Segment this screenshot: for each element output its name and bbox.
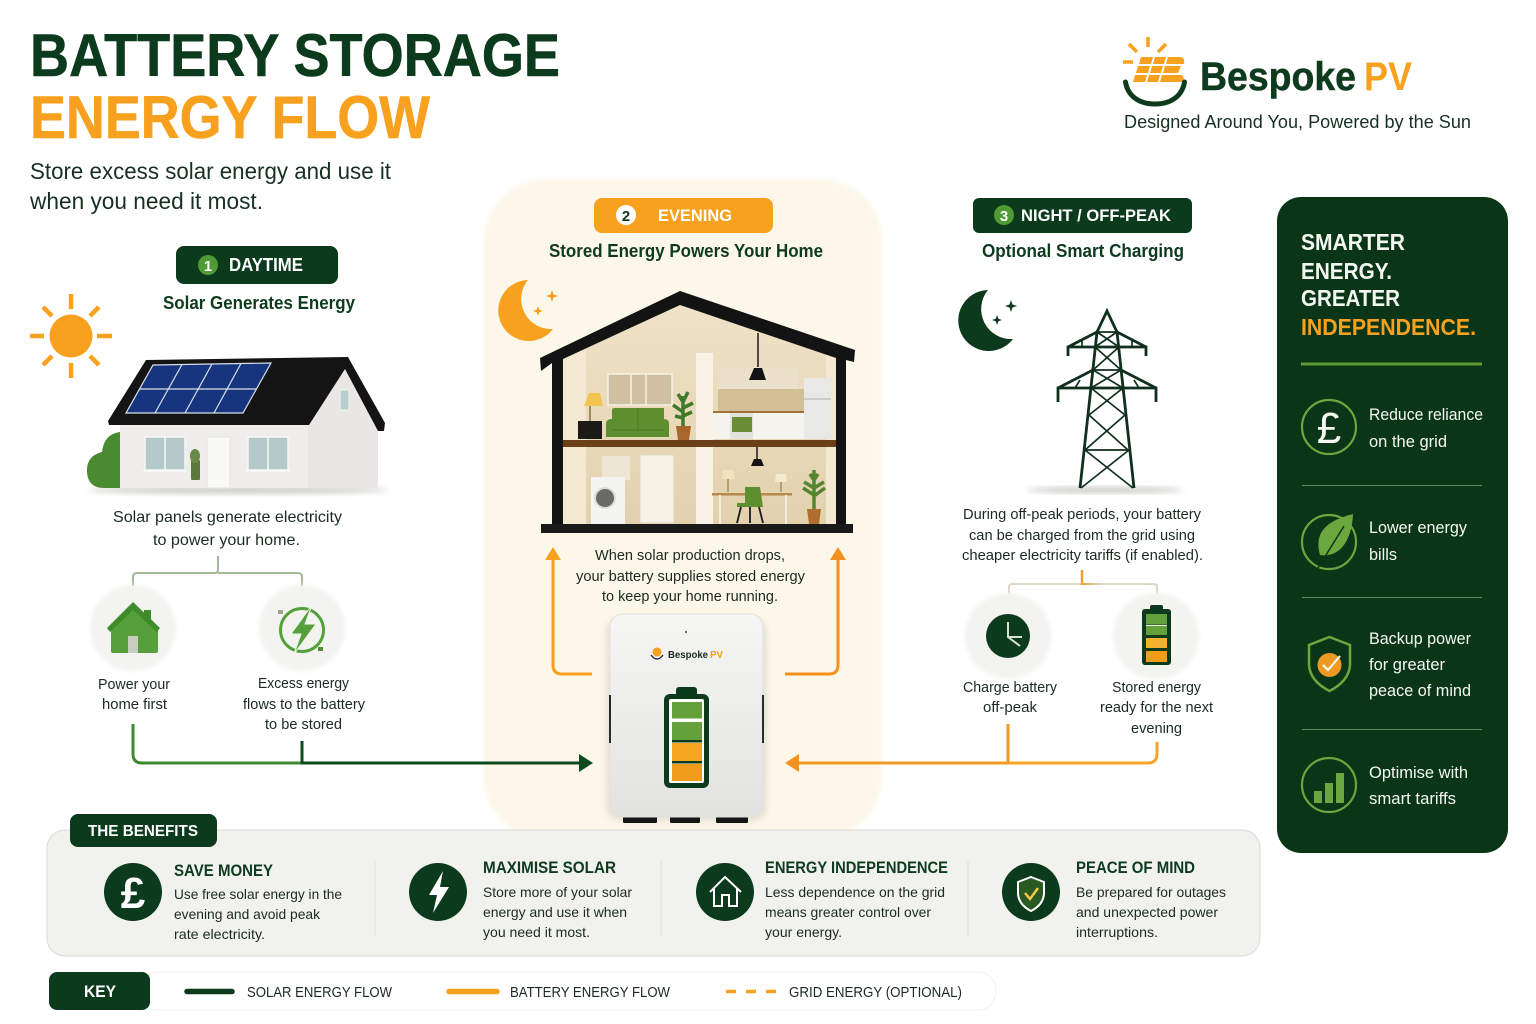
- item: charge battery off-peak: Charge battery: [963, 680, 1058, 696]
- item: excess energy: [243, 585, 366, 733]
- logo wordmark: Bespoke: [1200, 55, 1356, 99]
- item: backup power: [1309, 629, 1471, 700]
- benefit: energy independence: your energy.: [765, 924, 842, 940]
- icon: green house: [107, 602, 160, 653]
- text: during off-peak periods: [962, 506, 1203, 564]
- panel heading: [1301, 229, 1476, 340]
- item: backup power: peace of mind: [1369, 681, 1471, 700]
- mini logo: Bespoke: [668, 649, 708, 661]
- text: solar panels generate electricity: to power your home.: [153, 532, 300, 549]
- text: solar panels generate electricity: Solar panels generate electricity: [113, 509, 342, 526]
- item: optimise with smart tariffs: smart tariffs: [1369, 789, 1456, 808]
- panel heading: GREATER: [1301, 285, 1400, 311]
- panel heading: ENERGY.: [1301, 258, 1392, 284]
- benefit: maximise solar: you need it most.: [483, 924, 590, 940]
- text: during off-peak periods: cheaper electricity tariffs (if enabled).: [962, 547, 1203, 564]
- key: grid energy optional: GRID ENERGY (OPTIONAL): [789, 985, 962, 1001]
- badge: night: NIGHT / OFF-PEAK: [1021, 206, 1172, 225]
- heading: solar generates energy: Solar Generates Energy: [163, 293, 355, 313]
- benefit: save money: SAVE MONEY: [174, 862, 273, 880]
- text: when solar production drops: [576, 547, 805, 605]
- evening background panel: [484, 179, 882, 839]
- badge: night: 3: [1000, 208, 1008, 225]
- item: reduce reliance: Reduce reliance: [1369, 405, 1483, 424]
- heading: optional smart charging: Optional Smart Charging: [982, 241, 1184, 261]
- badge: evening: [594, 198, 773, 233]
- title: [30, 22, 560, 151]
- badge: daytime: DAYTIME: [229, 255, 303, 275]
- item: excess energy: flows to the battery: [243, 697, 366, 713]
- item: stored energy: evening: [1131, 721, 1182, 737]
- benefit: maximise solar: energy and use it when: [483, 904, 627, 920]
- icon: dark moon and stars: [958, 290, 1017, 351]
- benefit: peace of mind: PEACE OF MIND: [1076, 859, 1195, 877]
- item: lower energy bills: Lower energy: [1369, 518, 1467, 537]
- benefit: save money: £: [121, 869, 146, 918]
- badge: daytime: 1: [204, 258, 212, 275]
- benefit: energy independence: [696, 859, 948, 940]
- benefit: peace of mind: interruptions.: [1076, 924, 1158, 940]
- bush: [87, 432, 120, 488]
- item: charge battery off-peak: off-peak: [983, 700, 1038, 716]
- badge: evening: 2: [622, 208, 630, 225]
- battery unit: [606, 614, 767, 823]
- benefit: maximise solar: MAXIMISE SOLAR: [483, 859, 616, 877]
- text: when solar production drops: When solar production drops,: [595, 547, 785, 564]
- text: during off-peak periods: During off-peak periods, your battery: [963, 506, 1201, 523]
- arrow: solar energy flow to battery: [133, 724, 593, 772]
- logo: Bespoke PV: [1123, 37, 1471, 132]
- item: reduce reliance: on the grid: [1369, 432, 1447, 451]
- panel heading: INDEPENDENCE.: [1301, 314, 1476, 340]
- text: when solar production drops: to keep your home running.: [602, 588, 778, 605]
- item: lower energy bills: [1302, 514, 1467, 569]
- connector: split to two outcomes: [133, 556, 302, 586]
- key label: KEY: [84, 983, 116, 1001]
- subtitle: when you need it most.: [29, 188, 263, 214]
- solar panels: [126, 363, 271, 413]
- benefit: energy independence: means greater control over: [765, 904, 931, 920]
- benefit: save money: Use free solar energy in the: [174, 886, 342, 902]
- kitchen: [713, 333, 831, 439]
- item: charge battery off-peak: [963, 593, 1058, 716]
- badge: daytime: [176, 246, 338, 284]
- panel: evening: [498, 198, 855, 823]
- connector: split to two outcomes: [1009, 570, 1157, 594]
- item: reduce reliance: £: [1317, 404, 1341, 453]
- icon: clock: [986, 614, 1030, 658]
- item: backup power: for greater: [1369, 655, 1445, 674]
- battery level icon: [664, 687, 709, 788]
- illustration: house with solar panels: [87, 357, 388, 494]
- benefit: energy independence: ENERGY INDEPENDENCE: [765, 859, 948, 877]
- logo wordmark: PV: [1364, 55, 1412, 99]
- item: lower energy bills: bills: [1369, 545, 1397, 564]
- panel: the benefits: [47, 814, 1260, 956]
- subtitle: Store excess solar energy and use it: [30, 158, 392, 184]
- key: solar energy flow: SOLAR ENERGY FLOW: [247, 985, 392, 1001]
- tagline: Designed Around You, Powered by the Sun: [1124, 111, 1471, 132]
- panel: night / off-peak: [958, 198, 1213, 737]
- icon: charging bolt: [278, 605, 324, 654]
- item: optimise with smart tariffs: [1302, 758, 1468, 812]
- icon: battery: [1142, 605, 1171, 665]
- item: optimise with smart tariffs: Optimise with: [1369, 763, 1468, 782]
- key: battery energy flow: BATTERY ENERGY FLOW: [510, 985, 670, 1001]
- item: reduce reliance: [1302, 400, 1483, 454]
- living room: [578, 374, 693, 440]
- heading: stored energy powers your home: Stored Energy Powers Your Home: [549, 241, 823, 261]
- benefit: save money: evening and avoid peak: [174, 906, 321, 922]
- benefit: peace of mind: Be prepared for outages: [1076, 884, 1226, 900]
- panel: smarter energy: [1277, 197, 1508, 853]
- item: excess energy: to be stored: [265, 717, 342, 733]
- illustration: house cross-section: [540, 291, 855, 533]
- key label: [49, 972, 150, 1010]
- item: excess energy: Excess energy: [258, 676, 350, 692]
- icon: sun: [30, 294, 112, 378]
- roof and walls: [540, 291, 855, 524]
- title: BATTERY STORAGE: [30, 22, 560, 89]
- pillar: [696, 353, 713, 524]
- benefit: save money: rate electricity.: [174, 926, 265, 942]
- item: power your home first: Power your: [98, 677, 170, 693]
- panel: daytime: [30, 246, 388, 733]
- icon: orange moon and stars: [498, 280, 558, 341]
- badge: night: [973, 198, 1192, 233]
- item: stored energy: [1100, 593, 1213, 737]
- panel heading: SMARTER: [1301, 229, 1405, 255]
- subtitle: [29, 158, 392, 214]
- arrow: battery to home, left: [545, 547, 592, 674]
- item: backup power: Backup power: [1369, 629, 1471, 648]
- badge: evening: EVENING: [658, 206, 732, 225]
- benefit: peace of mind: [1002, 859, 1226, 940]
- mini logo: PV: [710, 649, 723, 661]
- benefit: peace of mind: and unexpected power: [1076, 904, 1218, 920]
- text: when solar production drops: your battery supplies stored energy: [576, 568, 805, 585]
- item: stored energy: Stored energy: [1112, 680, 1202, 696]
- benefit: save money: [104, 862, 342, 942]
- text: solar panels generate electricity: [113, 509, 342, 549]
- benefit: maximise solar: Store more of your solar: [483, 884, 632, 900]
- key: [49, 972, 996, 1010]
- mini logo: [651, 648, 723, 661]
- item: stored energy: ready for the next: [1100, 700, 1213, 716]
- tab: the benefits: [70, 814, 217, 847]
- benefit: maximise solar: [409, 859, 632, 940]
- item: power your home first: [90, 585, 176, 713]
- tab: the benefits: THE BENEFITS: [88, 823, 198, 840]
- arrow: grid charging flow to battery: [785, 724, 1157, 772]
- text: during off-peak periods: can be charged from the grid using: [969, 527, 1195, 544]
- illustration: electricity pylon: [1027, 311, 1183, 493]
- title: ENERGY FLOW: [30, 84, 430, 151]
- benefit: energy independence: Less dependence on the grid: [765, 884, 945, 900]
- arrow: battery to home, right: [785, 547, 846, 674]
- icon: logo sun and solar panel: [1123, 37, 1184, 104]
- item: power your home first: home first: [102, 697, 167, 713]
- ground floor: [591, 447, 825, 524]
